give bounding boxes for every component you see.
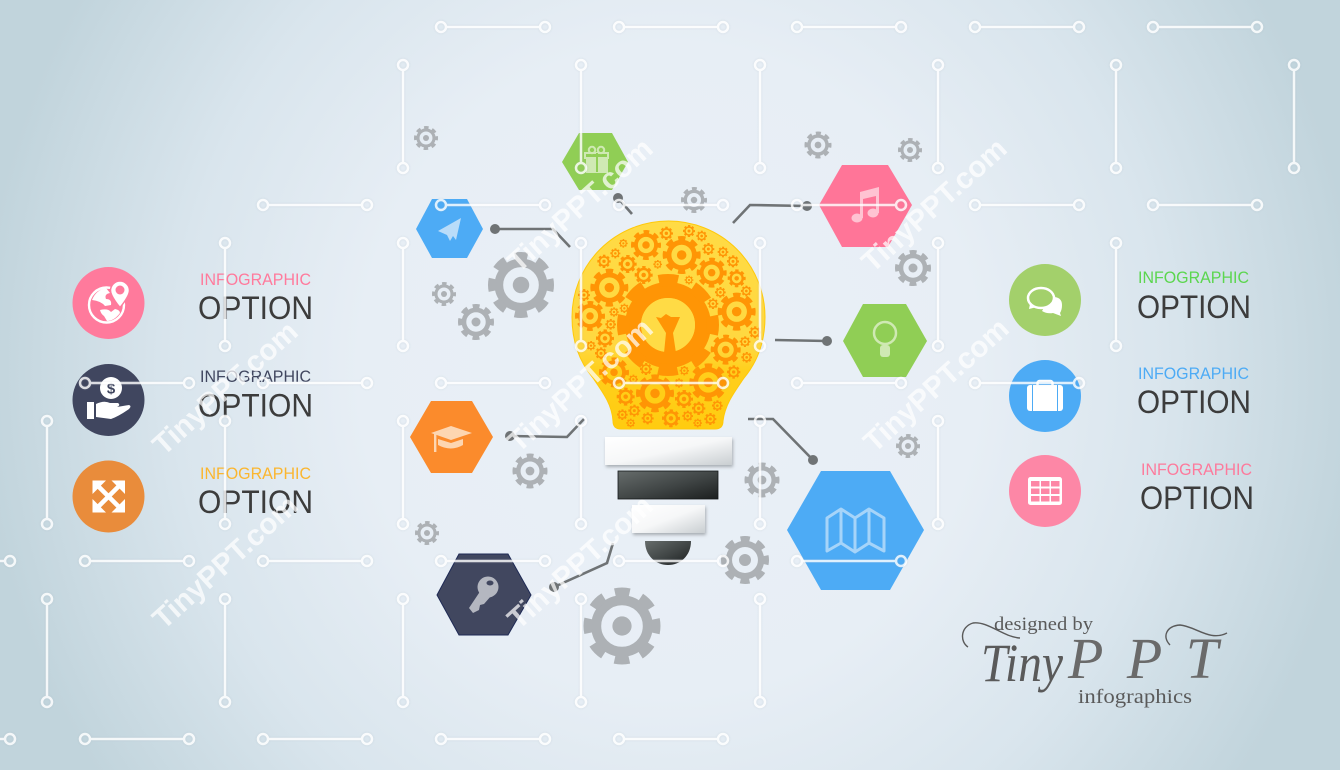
value: OPTION xyxy=(1137,289,1251,325)
watermarks: TinyPPT.com xyxy=(501,132,659,279)
label: INFOGRAPHIC xyxy=(200,465,311,483)
label: INFOGRAPHIC xyxy=(1141,461,1252,479)
right option 1 xyxy=(1009,264,1251,336)
value: OPTION xyxy=(1140,480,1254,516)
value: OPTION xyxy=(198,290,313,326)
icon: key xyxy=(469,576,498,613)
icon: graduation cap xyxy=(431,426,472,452)
bulb base: white band xyxy=(632,505,705,533)
logo: designed by TinyPPT infographics xyxy=(963,615,1227,708)
icon: gift xyxy=(585,147,608,172)
label: INFOGRAPHIC xyxy=(1138,269,1249,287)
left option 3 xyxy=(72,460,313,532)
central gear xyxy=(623,280,713,370)
watermarks xyxy=(146,132,1015,636)
hexagon: graduation cap xyxy=(410,401,493,473)
label: INFOGRAPHIC xyxy=(1138,365,1249,383)
watermarks: TinyPPT.com xyxy=(146,315,304,462)
icon: music note xyxy=(852,187,879,222)
icon: hand with coin: $ xyxy=(107,380,116,398)
logo swashes xyxy=(963,623,1227,647)
small grey gears xyxy=(415,127,929,660)
right option 2 xyxy=(1009,360,1251,432)
left option 2 xyxy=(72,364,313,436)
hexagon: gift xyxy=(562,133,628,190)
label: INFOGRAPHIC xyxy=(200,271,311,289)
bulb base: cap xyxy=(645,541,691,565)
icon: map xyxy=(827,509,884,552)
icon: expand arrows xyxy=(72,460,144,532)
value: OPTION xyxy=(198,388,313,424)
light bulb xyxy=(572,221,765,565)
left option 1 xyxy=(72,267,313,339)
icon: light bulb xyxy=(874,322,896,357)
watermarks: TinyPPT.com xyxy=(501,489,659,636)
bulb base: dark band xyxy=(618,471,718,499)
hexagon: key xyxy=(437,554,531,635)
connector lines xyxy=(490,193,832,592)
bulb glass xyxy=(572,221,765,429)
logo: designed by TinyPPT infographics: Tiny xyxy=(981,633,1063,693)
hexagon: paper plane xyxy=(416,199,483,258)
icon: hand with coin xyxy=(72,364,144,436)
gears inside the bulb xyxy=(577,226,760,427)
right option 3 xyxy=(1009,455,1254,527)
icon: globe and pin xyxy=(72,267,144,339)
watermarks: TinyPPT.com xyxy=(857,312,1015,459)
icon: chat bubbles xyxy=(1009,264,1081,336)
bulb base: white collar xyxy=(605,437,732,465)
watermarks: TinyPPT.com xyxy=(855,132,1013,279)
hexagon: map xyxy=(787,471,924,590)
hexagon: light bulb xyxy=(843,304,927,377)
value: OPTION xyxy=(1137,384,1251,420)
icon: paper plane xyxy=(438,218,461,241)
icon: suitcase xyxy=(1009,360,1081,432)
label: INFOGRAPHIC xyxy=(200,368,311,386)
watermarks: TinyPPT.com xyxy=(501,312,659,459)
watermarks: TinyPPT.com xyxy=(146,489,304,636)
logo: designed by TinyPPT infographics: infographics xyxy=(1078,686,1192,708)
icon: table xyxy=(1009,455,1081,527)
value: OPTION xyxy=(198,484,313,520)
logo: designed by TinyPPT infographics: designed by xyxy=(994,615,1094,635)
logo: designed by TinyPPT infographics: PPT xyxy=(1067,626,1222,691)
hexagon: music xyxy=(819,165,912,247)
